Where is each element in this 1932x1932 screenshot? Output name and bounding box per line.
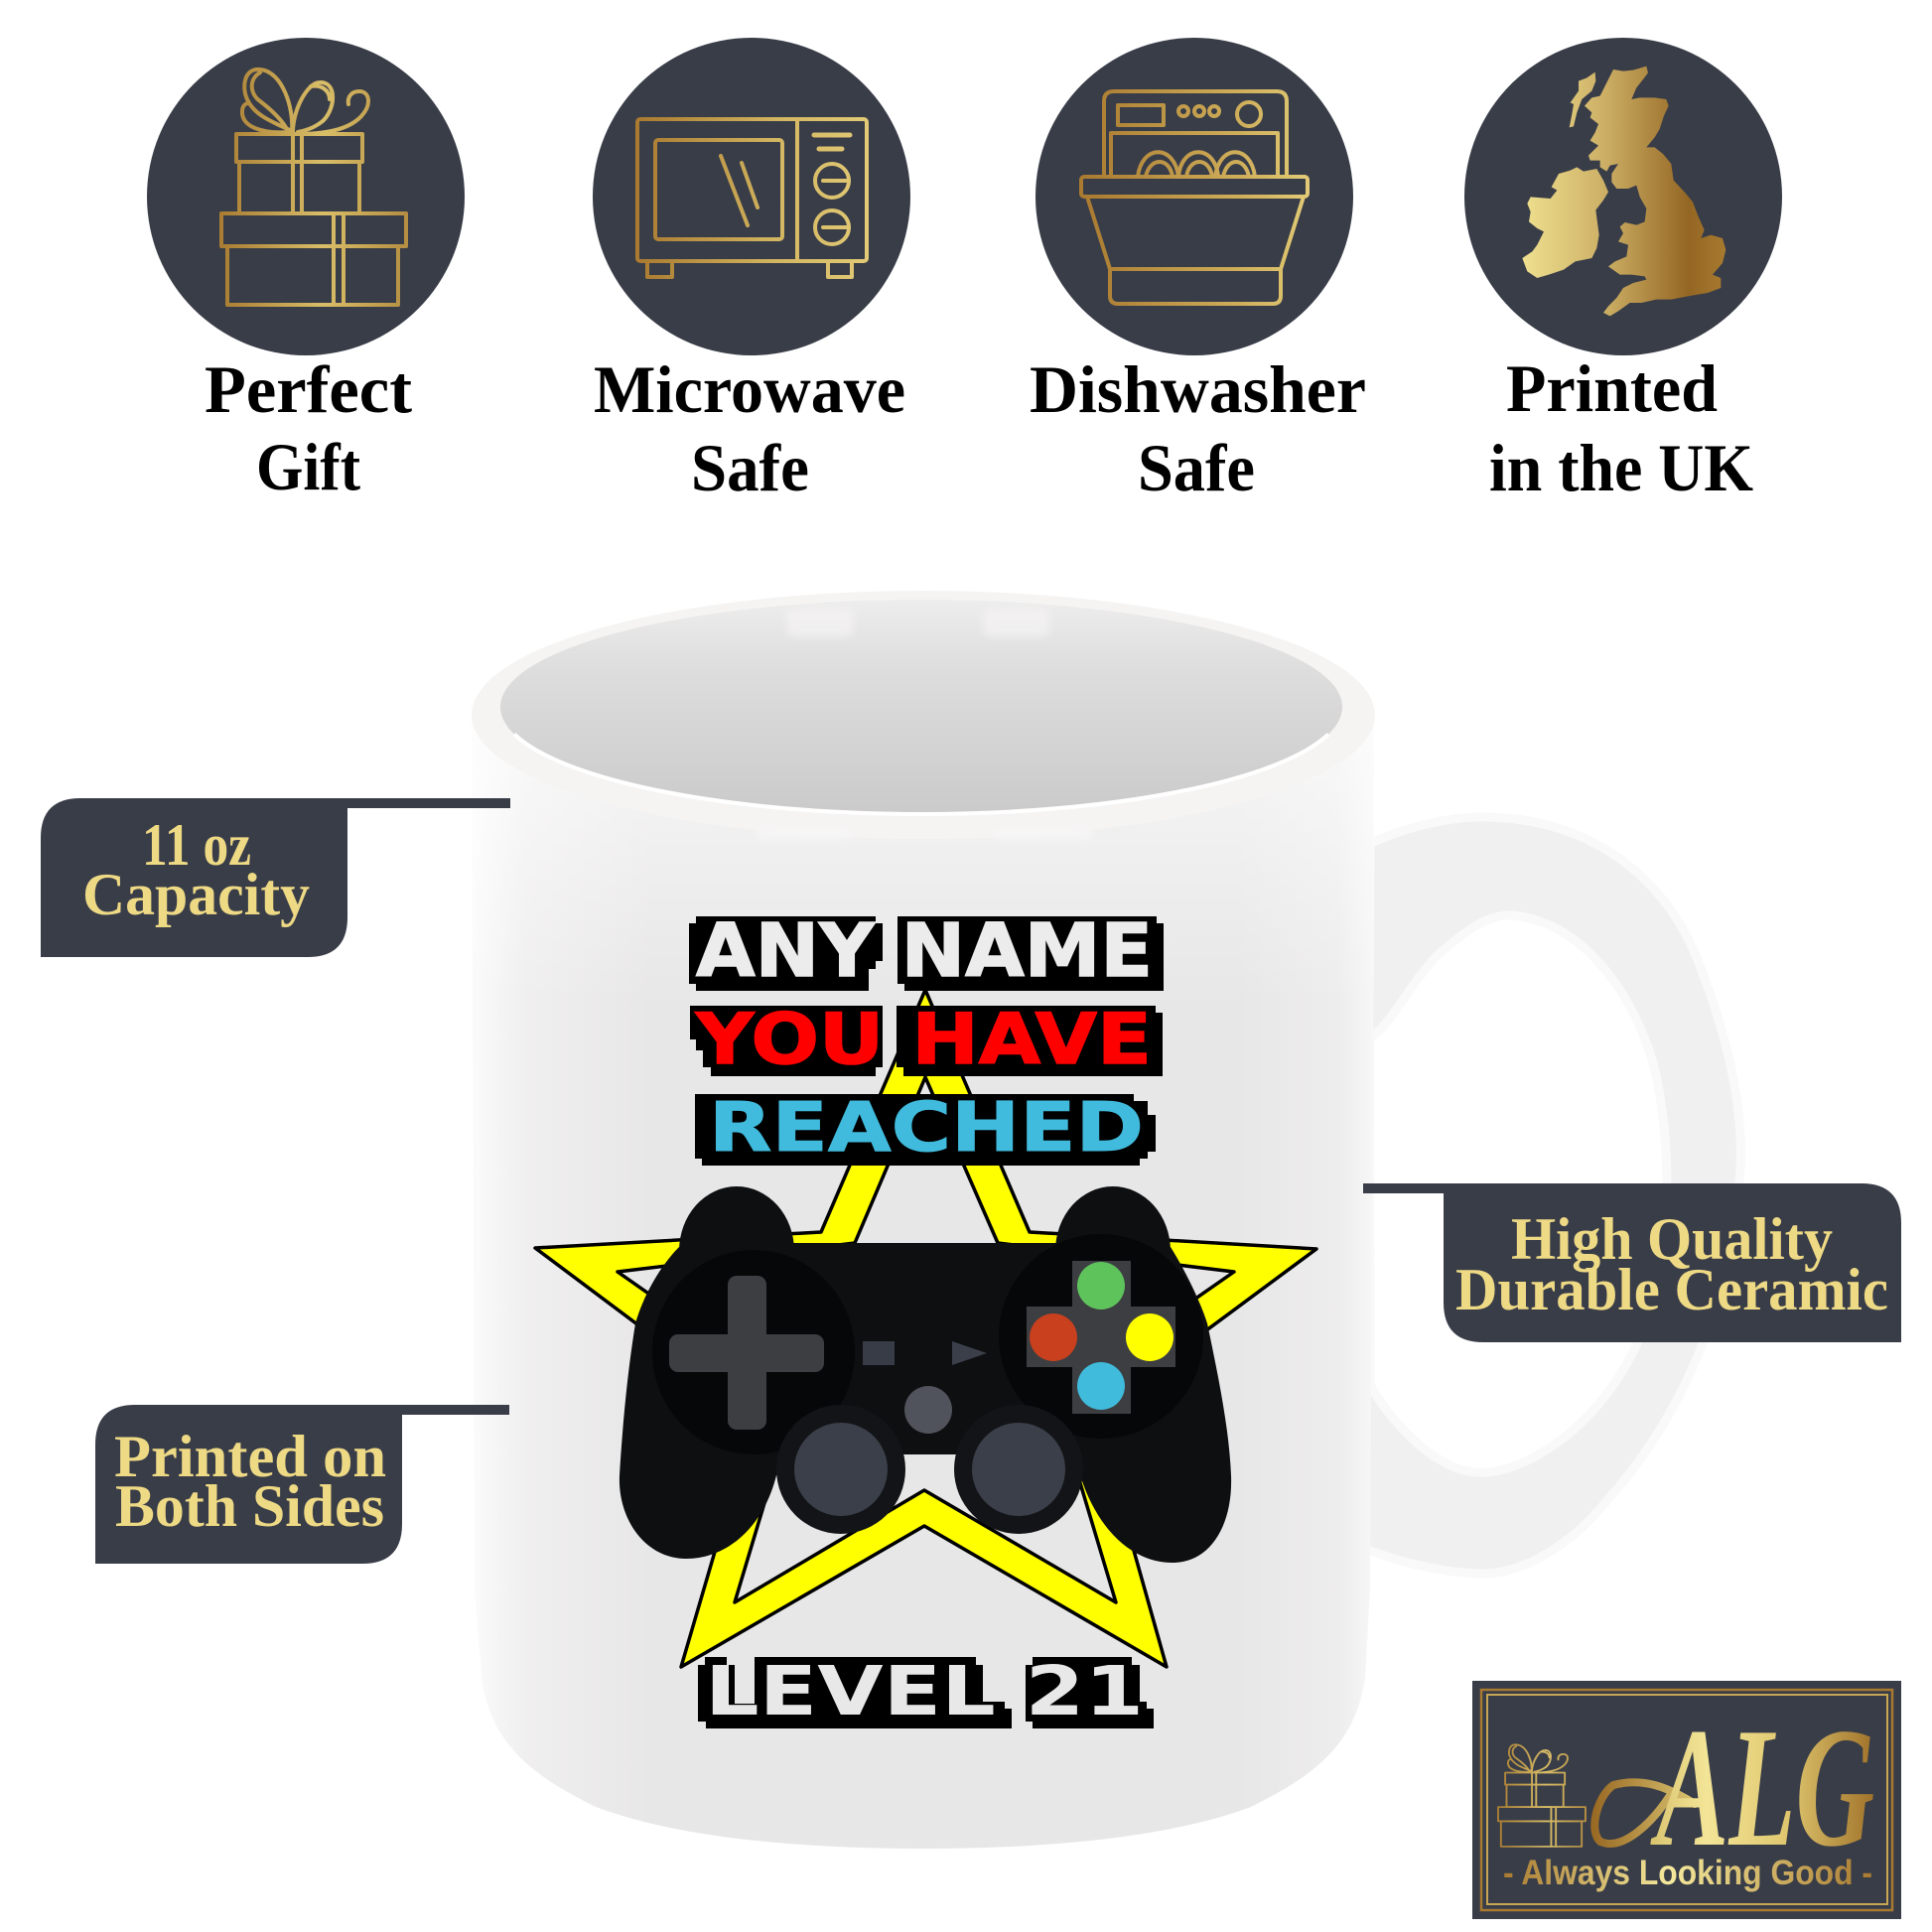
icon: microwave <box>593 38 910 355</box>
callout: printed on both sides: Printed on <box>114 1424 386 1489</box>
callout: printed on both sides: Both Sides <box>115 1473 384 1539</box>
label: microwave safe: Microwave <box>594 351 905 427</box>
mug print: game controller <box>620 1186 1231 1563</box>
mug photo <box>472 591 1740 1849</box>
callout: printed on both sides <box>95 1405 509 1564</box>
label: perfect gift: Gift <box>256 429 360 504</box>
logo: always looking good <box>1472 1681 1901 1919</box>
logo tagline: - Always Looking Good - <box>1503 1854 1872 1892</box>
logo monogram swash <box>1594 1782 1695 1844</box>
left stick <box>776 1405 905 1534</box>
callout: capacity: 11 oz <box>142 812 251 878</box>
label: dishwasher safe <box>1030 351 1366 505</box>
label: dishwasher safe: Dishwasher <box>1030 351 1366 427</box>
label: microwave safe <box>594 351 905 505</box>
callout: high quality durable ceramic <box>1363 1183 1901 1342</box>
label: printed in the UK <box>1489 350 1753 505</box>
mug body highlight <box>472 715 1374 1003</box>
callout: high quality durable ceramic: Durable Ceramic <box>1455 1257 1888 1322</box>
mug handle <box>1365 817 1740 1574</box>
mug print: any name: ANY NAME <box>696 908 1153 994</box>
centre button <box>904 1386 952 1434</box>
mug inside <box>500 600 1342 814</box>
callout: high quality durable ceramic: High Quality <box>1511 1206 1833 1272</box>
mug print: star <box>535 990 1316 1667</box>
callout: capacity <box>41 798 510 957</box>
rim highlight <box>514 735 1328 814</box>
select and start <box>863 1341 987 1365</box>
right stick <box>954 1405 1083 1534</box>
mug print: level 21: LEVEL 21 <box>705 1652 1144 1731</box>
mug body <box>472 715 1374 1849</box>
mug print: reached: REACHED <box>709 1088 1144 1168</box>
label: perfect gift: Perfect <box>205 351 412 427</box>
left pad <box>652 1250 855 1454</box>
label: dishwasher safe: Safe <box>1138 430 1255 505</box>
label: printed in the UK: in the UK <box>1489 430 1753 505</box>
icon: perfect gift <box>147 38 465 355</box>
logo gift icon <box>1498 1744 1586 1847</box>
label: perfect gift <box>205 351 412 504</box>
right pad and buttons <box>999 1234 1203 1439</box>
mug print: you have: YOU HAVE <box>695 999 1152 1080</box>
callout: capacity: Capacity <box>82 862 310 927</box>
label: microwave safe: Safe <box>691 430 809 505</box>
icon: UK map <box>1464 38 1782 355</box>
icon: dishwasher <box>1035 38 1353 355</box>
label: printed in the UK: Printed <box>1506 350 1718 426</box>
mug rim <box>472 591 1375 839</box>
inner and outer gloss <box>757 608 1092 840</box>
